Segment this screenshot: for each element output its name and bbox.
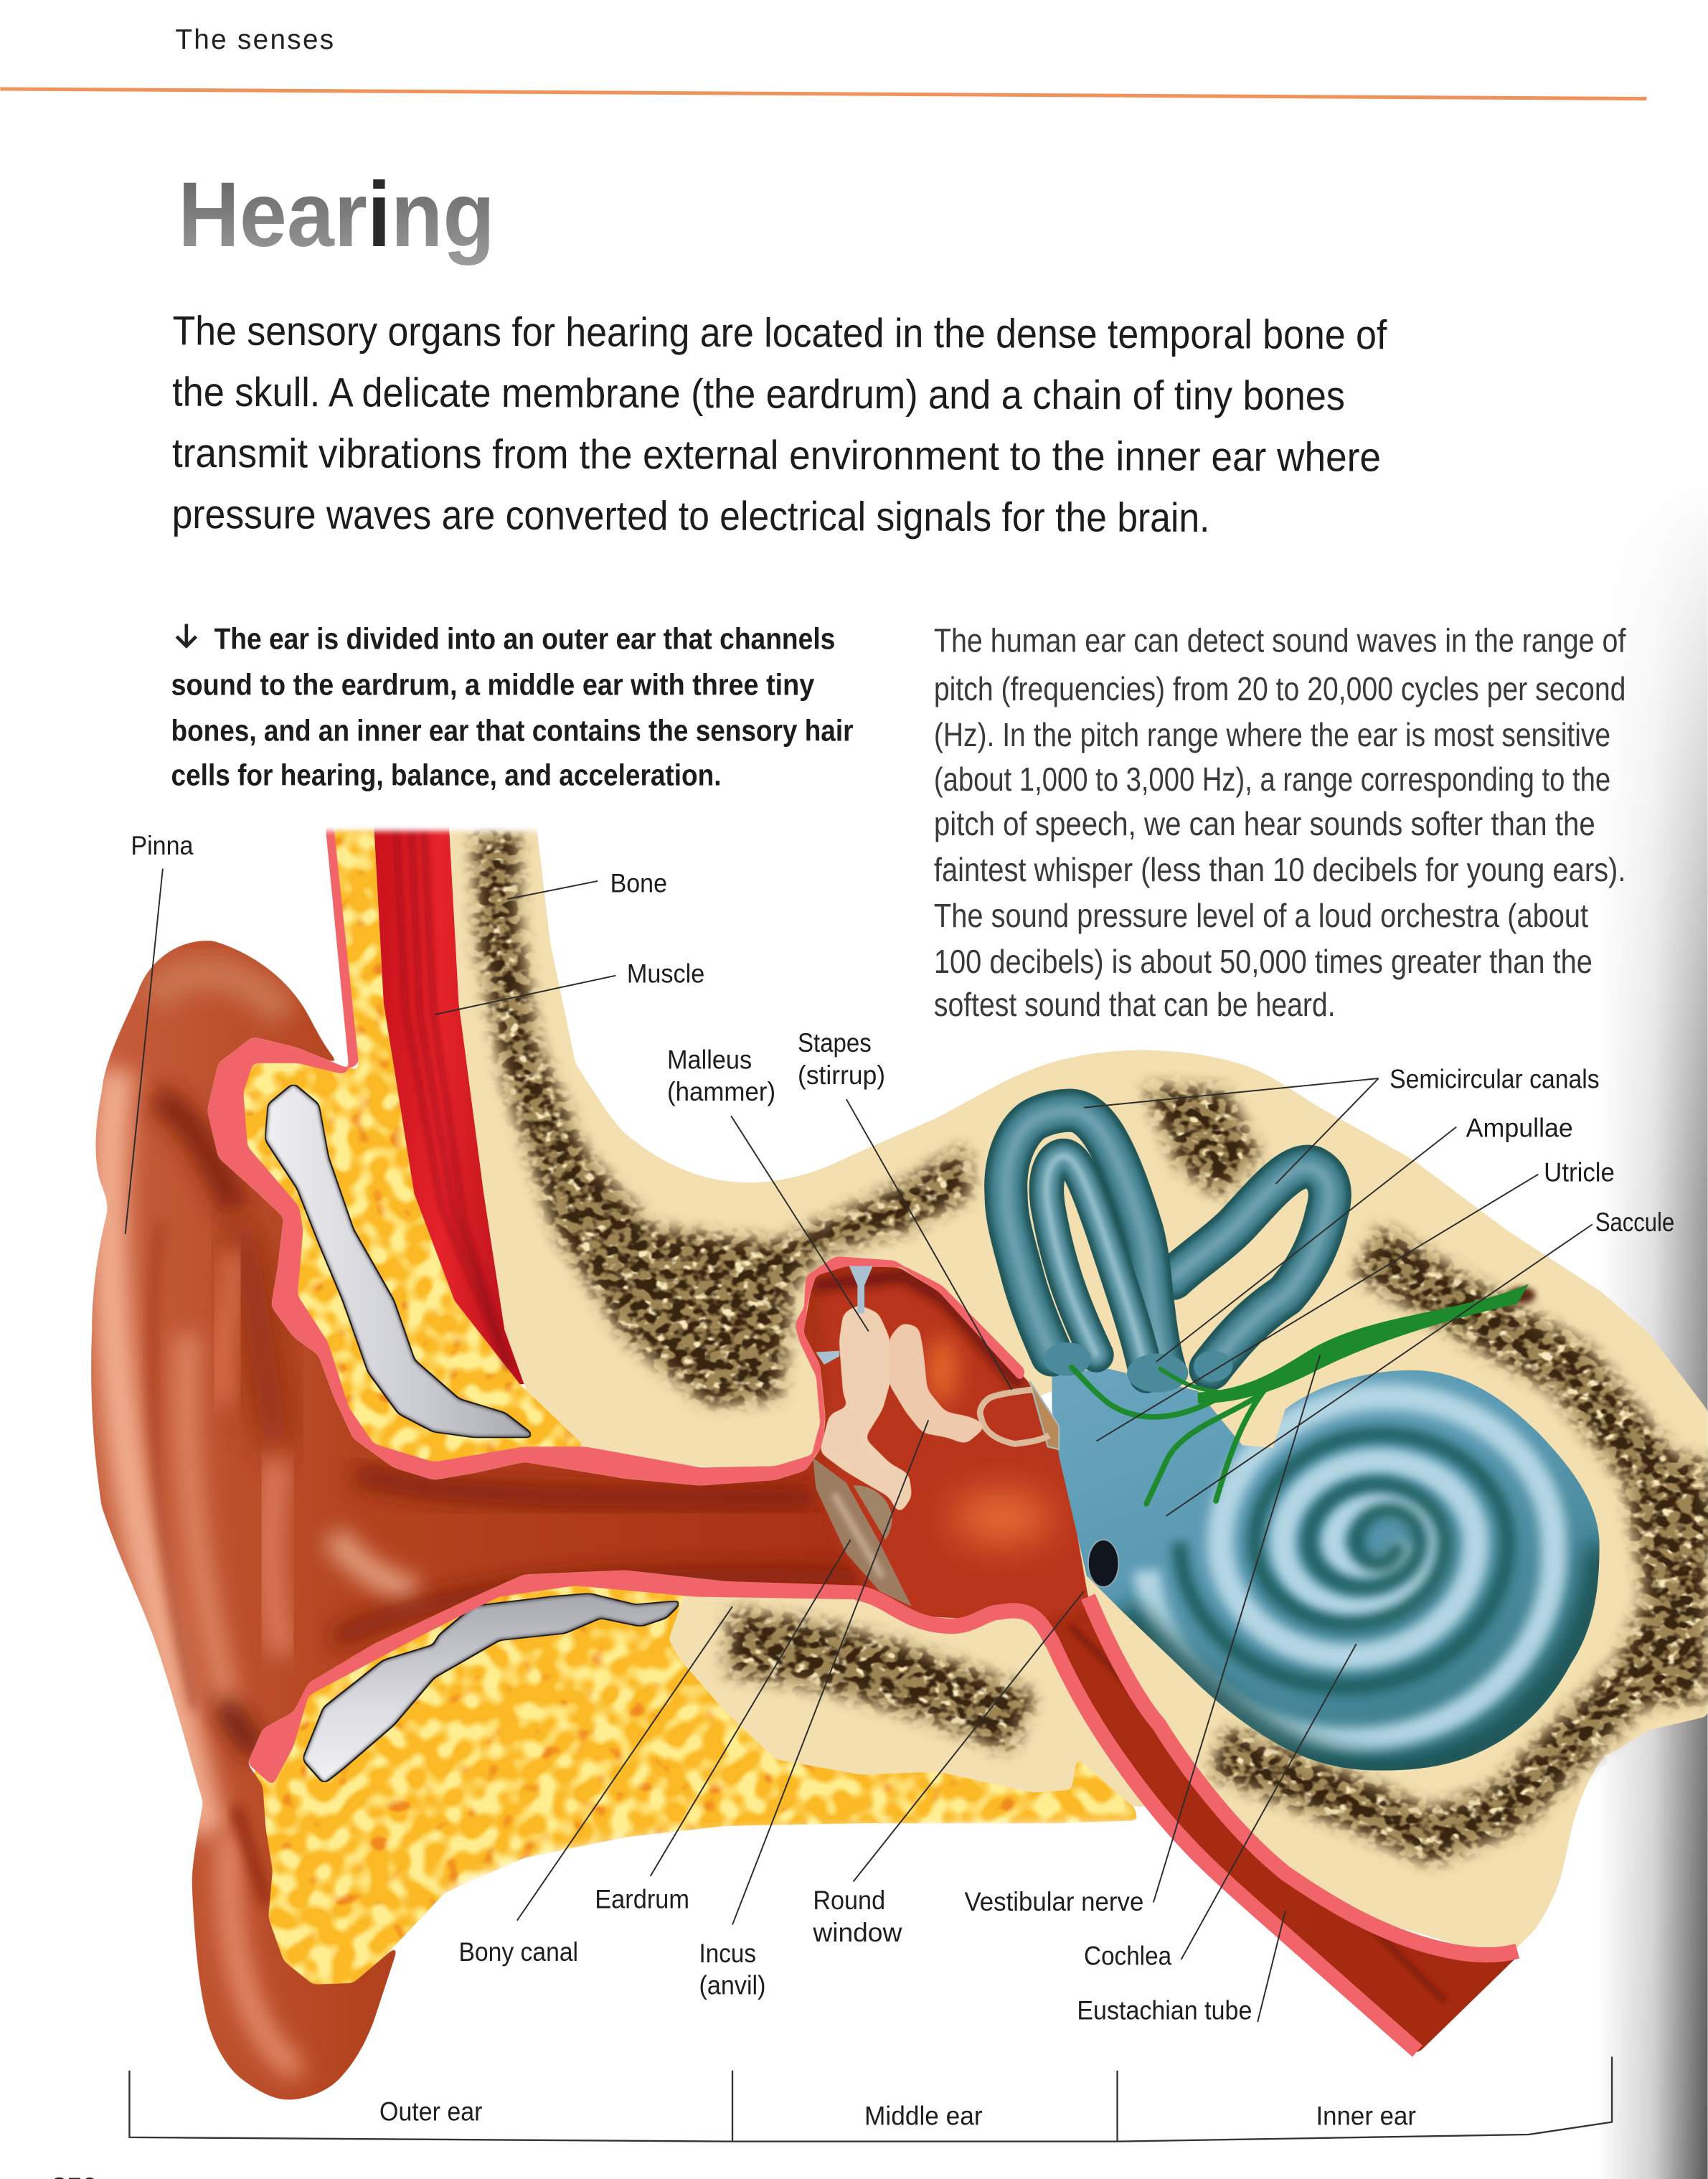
bone	[449, 825, 1708, 1959]
soft white edge of the fat	[445, 1807, 1153, 1901]
caption with down arrow	[171, 622, 854, 791]
labels: Ampullae	[1466, 1113, 1573, 1142]
body text column	[934, 621, 1626, 1023]
incus	[890, 1323, 986, 1444]
labels: Eardrum	[595, 1884, 689, 1914]
skin: pinna, ear canal, middle ear	[70, 917, 1542, 2112]
inner ear: vestibule and cochlea	[1052, 1369, 1600, 1771]
labels: Pinna	[131, 831, 194, 860]
labels: Stapes	[798, 1028, 872, 1058]
leader lines	[126, 869, 1593, 2022]
labels: Malleus	[667, 1045, 752, 1074]
intro paragraph	[172, 308, 1387, 542]
body text column: The sound pressure level of a loud orchestra (about	[934, 897, 1588, 934]
eardrum	[813, 1458, 912, 1606]
caption with down arrow: sound to the eardrum, a middle ear with three tiny	[171, 667, 814, 701]
intro paragraph: The sensory organs for hearing are located in the dense temporal bone of	[172, 308, 1387, 358]
page gutter shadow	[1608, 540, 1707, 2179]
labels: Utricle	[1544, 1157, 1615, 1187]
body text column: softest sound that can be heard.	[934, 986, 1336, 1023]
body text column: pitch of speech, we can hear sounds softer than the	[934, 805, 1595, 842]
round window	[1088, 1540, 1118, 1587]
labels: Saccule	[1595, 1208, 1674, 1237]
pink lining: upper canal and middle ear roof	[207, 825, 1026, 1486]
labels: Round	[813, 1886, 885, 1915]
upper cartilage	[265, 1084, 535, 1437]
labels: Bone	[610, 868, 667, 898]
intro paragraph: pressure waves are converted to electrical signals for the brain.	[172, 491, 1210, 541]
lower cartilage	[303, 1594, 682, 1783]
bracket: outer, middle and inner ear	[129, 2057, 1612, 2142]
intro paragraph: the skull. A delicate membrane (the eardrum) and a chain of tiny bones	[172, 370, 1345, 419]
icon: down arrow	[176, 624, 196, 646]
caption with down arrow: bones, and an inner ear that contains the sensory hair	[171, 713, 854, 747]
bracket: outer, middle and inner ear: Outer ear	[379, 2097, 482, 2127]
caption with down arrow: cells for hearing, balance, and acceleration.	[171, 758, 722, 791]
labels: Cochlea	[1084, 1942, 1172, 1971]
labels: Eustachian tube	[1077, 1995, 1252, 2025]
bracket: outer, middle and inner ear: Middle ear	[864, 2101, 983, 2130]
pink lining: lower canal	[247, 1571, 864, 1786]
title: Hearing: Hearing	[178, 164, 495, 266]
labels: (anvil)	[699, 1970, 766, 2000]
labels: (hammer)	[667, 1077, 775, 1106]
stapes	[980, 1381, 1059, 1449]
intro paragraph: transmit vibrations from the external environment to the inner ear where	[172, 430, 1381, 481]
ampullae	[1044, 1342, 1232, 1393]
white fade at the top of the illustration	[313, 814, 549, 831]
caption with down arrow: The ear is divided into an outer ear that channels	[214, 622, 835, 656]
labels: Bony canal	[458, 1937, 578, 1967]
fat: lower mass	[247, 1578, 1138, 1992]
muscle	[374, 825, 524, 1384]
labels	[131, 831, 1674, 2025]
labels: window	[812, 1918, 902, 1947]
labels: Vestibular nerve	[964, 1887, 1143, 1916]
malleus	[820, 1305, 912, 1515]
bracket: outer, middle and inner ear: Inner ear	[1316, 2101, 1416, 2130]
labels: (stirrup)	[798, 1060, 885, 1090]
fat: upper strip	[222, 825, 585, 1473]
spongy bone texture	[476, 834, 1708, 1837]
labels: Incus	[699, 1939, 756, 1968]
body text column: 100 decibels) is about 50,000 times greater than the	[934, 943, 1593, 980]
pink lining: Eustachian tube	[856, 1593, 1517, 2051]
ligaments	[816, 1266, 873, 1365]
vestibular nerve	[1072, 1284, 1536, 1504]
semicircular canals	[1006, 1111, 1330, 1375]
labels: Muscle	[627, 959, 704, 988]
bone: lobe under the canal	[669, 1584, 1161, 1807]
labels: Semicircular canals	[1389, 1065, 1600, 1094]
ear illustration	[70, 814, 1708, 2112]
orange header rule	[0, 89, 1646, 99]
running head: The senses: The senses	[175, 24, 334, 55]
